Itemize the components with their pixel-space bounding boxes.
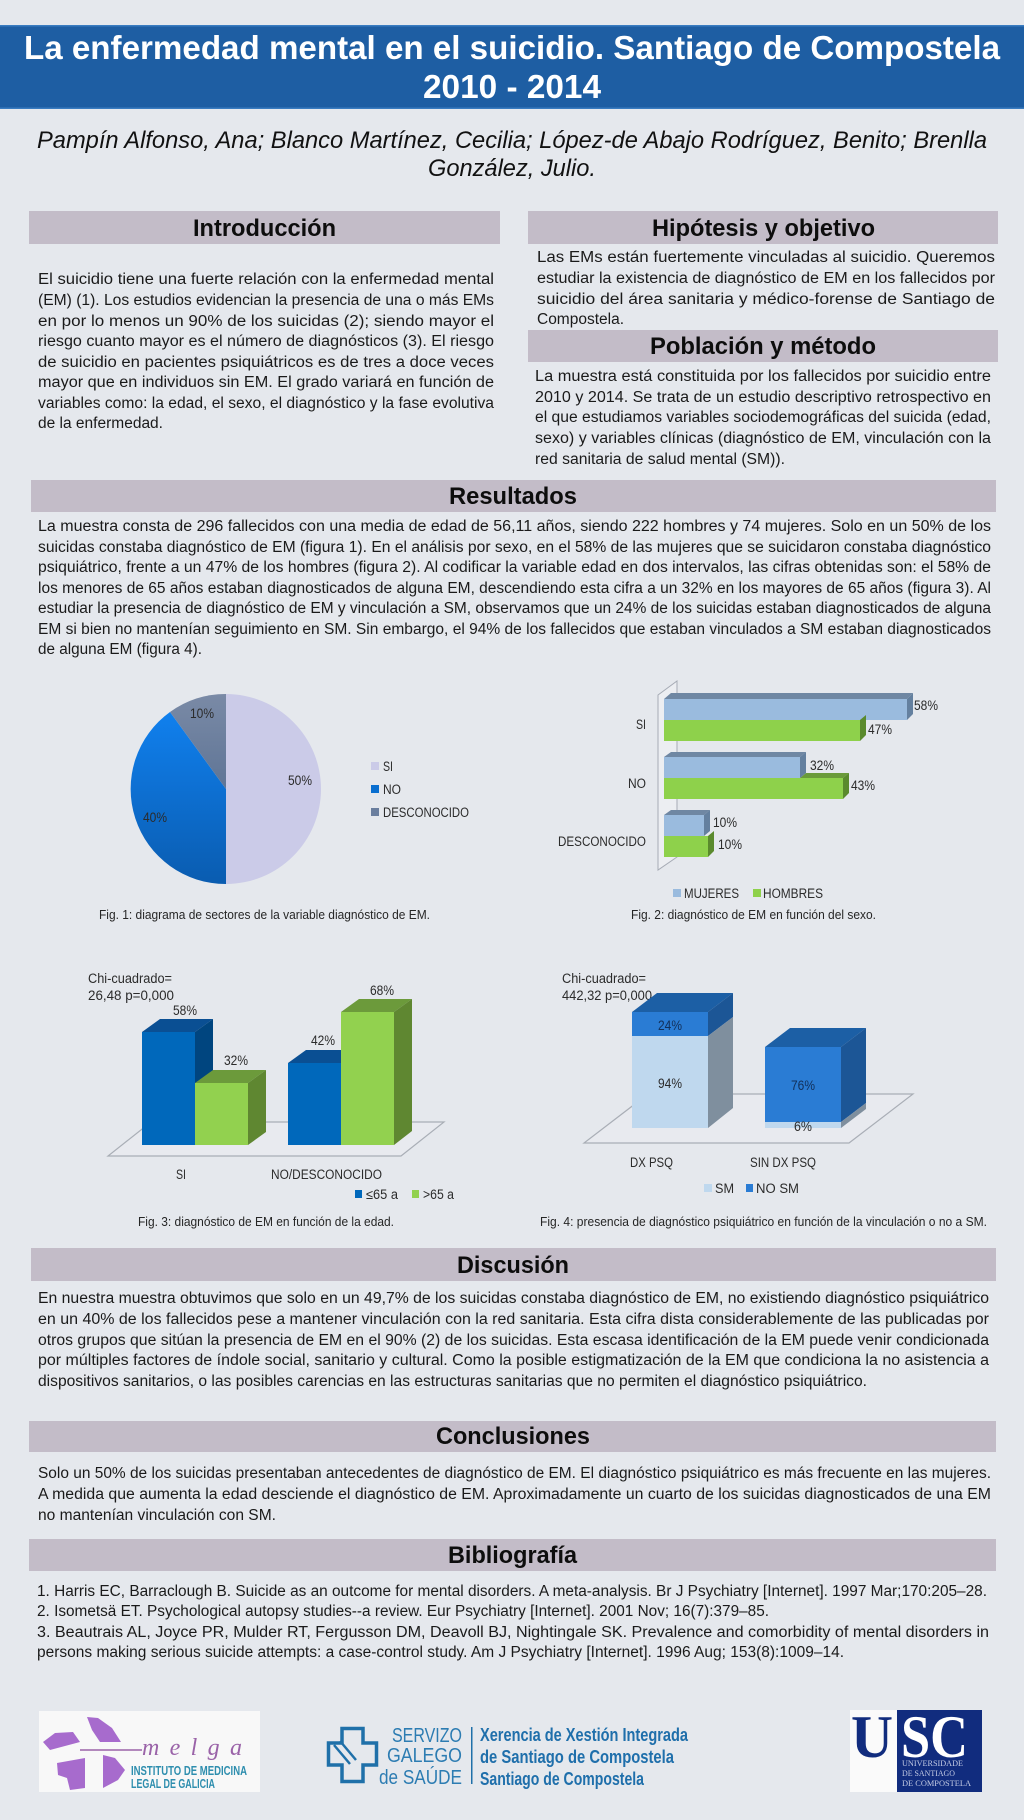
logo: Servizo Galego de Saúde — [328, 1725, 689, 1789]
authors — [37, 127, 987, 182]
value labels: 24% — [658, 1018, 682, 1033]
heading: discusión: Discusión — [457, 1252, 569, 1279]
text block: discusión: en un 40% de los fallecidos pese a mantener vinculación con la red sanitaria. Esta cifra dista considerablemente de las publicadas por — [38, 1311, 989, 1328]
category labels: DX PSQ — [630, 1155, 673, 1170]
value labels: 32% — [810, 758, 834, 773]
chi-square note — [562, 971, 652, 1003]
text block: introducción: (EM) (1). Los estudios evidencian la presencia de una o más EMs — [38, 292, 494, 309]
chart wall — [658, 681, 677, 870]
pie slice: DESCONOCIDO 10% — [170, 694, 226, 789]
logo: IMELGA: LEGAL DE GALICIA — [131, 1776, 215, 1791]
chart: figure 2 horizontal bars — [558, 681, 938, 901]
column: DX PSQ — [632, 993, 733, 1128]
text block: discusión: En nuestra muestra obtuvimos que solo en un 49,7% de los suicidas constaba diagnóstico de EM, no existiendo diagnóstico psiquiátrico — [38, 1290, 989, 1307]
text block: introducción: variables como: la edad, el sexo, el diagnóstico y la fase evolutiva — [38, 395, 494, 412]
panel: discusión — [31, 1248, 996, 1390]
text block: conclusiones — [38, 1465, 991, 1524]
bars: SI — [664, 693, 913, 741]
authors: González, Julio. — [428, 155, 596, 182]
category labels — [630, 1155, 816, 1170]
text block: población: el que estudiamos variables sociodemográficas del suicida (edad, — [535, 409, 991, 426]
text block: discusión: dispositivos sanitarios, o las posibles carencias en las estructuras sanitarias que no permiten el diagnóstico psiquiátrico. — [38, 1373, 867, 1390]
value labels: 58% — [173, 1003, 197, 1018]
text block: conclusiones: no mantenían vinculación con SM. — [38, 1507, 276, 1524]
heading: conclusiones — [29, 1421, 996, 1452]
category labels: NO/DESCONOCIDO — [271, 1167, 382, 1182]
text block: hipótesis: Las EMs están fuertemente vinculadas al suicidio. Queremos — [537, 249, 995, 266]
caption: figure 3: Fig. 3: diagnóstico de EM en función de la edad. — [138, 1215, 394, 1229]
columns: NO/DESCONOCIDO — [288, 999, 412, 1145]
floor — [584, 1094, 913, 1143]
title: La enfermedad mental en el suicidio. Santiago de Compostela — [24, 29, 1001, 66]
logo: USC — [850, 1704, 982, 1792]
chi-square note: Chi-cuadrado= — [88, 971, 172, 986]
panel: bibliografía — [29, 1539, 996, 1661]
text block: resultados: suicidas constaba diagnóstico de EM (figura 1). En el análisis por sexo, en el 58% de las mujeres que se suicidaron constaba diagnóstico — [38, 539, 991, 556]
logo: USC: U — [851, 1704, 893, 1770]
text block: references: 1. Harris EC, Barraclough B. Suicide as an outcome for mental disorders. A meta-analysis. Br J Psychiatry [Internet]. 1997 Mar;170:205–28. — [37, 1583, 987, 1600]
text block: introducción: en por lo menos un 90% de los suicidas (2); siendo mayor el — [38, 313, 494, 330]
text block: hipótesis — [537, 249, 995, 328]
legend: figure 1: NO — [383, 782, 401, 797]
value labels: 76% — [791, 1078, 815, 1093]
caption: figure 2: Fig. 2: diagnóstico de EM en función del sexo. — [631, 908, 876, 922]
floor — [108, 1122, 444, 1156]
text block: población — [535, 368, 991, 468]
text block: discusión: otros grupos que sitúan la presencia de EM en el 90% (2) de los suicidas. Esta escasa identificación de la EM puede venir condicionada — [38, 1332, 989, 1349]
chi-square note: 442,32 p=0,000 — [562, 988, 652, 1003]
chi-square note — [88, 971, 174, 1003]
text block: población: sexo) y variables clínicas (diagnóstico de EM, vinculación con la — [535, 430, 991, 447]
authors: Pampín Alfonso, Ana; Blanco Martínez, Cecilia; López-de Abajo Rodríguez, Benito; Brenlla — [37, 127, 987, 154]
pie slice: NO 40% — [131, 712, 226, 884]
logo: USC: UNIVERSIDADE — [902, 1758, 963, 1768]
category labels — [176, 1167, 382, 1182]
value labels — [173, 983, 394, 1068]
bars: DESCONOCIDO — [664, 810, 714, 857]
heading: introducción: Introducción — [193, 215, 336, 242]
panel: población y método — [528, 330, 998, 468]
value labels: 58% — [914, 698, 938, 713]
value labels: 6% — [794, 1119, 812, 1134]
category labels: SI — [176, 1167, 186, 1182]
category labels: SIN DX PSQ — [750, 1155, 816, 1170]
chart: figure 1 pie — [131, 694, 469, 884]
logo: Servizo Galego de Saúde: Xerencia de Xestión Integrada — [480, 1725, 689, 1745]
logo: Servizo Galego de Saúde: Santiago de Compostela — [480, 1769, 645, 1789]
text block: references: 2. Isometsä ET. Psychological autopsy studies--a review. Eur Psychiatry [Internet]. 2001 Nov; 16(7):379–85. — [37, 1603, 769, 1620]
value labels: 42% — [311, 1033, 335, 1048]
text block: introducción: mayor que en individuos sin EM. El grado variará en función de — [38, 374, 494, 391]
chi-square note: Chi-cuadrado= — [562, 971, 646, 986]
text block: hipótesis: suicidio del área sanitaria y médico-forense de Santiago de — [537, 291, 995, 308]
category labels: NO — [628, 776, 646, 791]
text block: resultados: La muestra consta de 296 fallecidos con una media de edad de 56,11 años, siendo 222 hombres y 74 mujeres. Solo en un 50% de los — [38, 518, 991, 535]
logo: USC: DE COMPOSTELA — [902, 1778, 972, 1788]
heading: bibliografía — [29, 1539, 996, 1571]
text block: conclusiones: Solo un 50% de los suicidas presentaban antecedentes de diagnóstico de EM. El diagnóstico psiquiátrico es más frecuente en las mujeres. — [38, 1465, 991, 1482]
title: 2010 - 2014 — [423, 68, 602, 105]
value labels: 94% — [658, 1076, 682, 1091]
text block: discusión — [38, 1290, 989, 1390]
value labels: 32% — [224, 1053, 248, 1068]
panel: resultados — [31, 480, 996, 658]
panel: introducción — [29, 211, 500, 432]
text block: resultados: EM si bien no mantenían seguimiento en SM. Sin embargo, el 94% de los fallecidos que estaban vinculados a SM estaban diagnosticados — [38, 621, 991, 638]
heading: población y método: Población y método — [650, 333, 876, 360]
text block: resultados: los menores de 65 años estaban diagnosticados de alguna EM, descendiendo esta cifra a un 32% en los mayores de 65 años (figura 3). Al — [38, 580, 991, 597]
caption: figure 4: Fig. 4: presencia de diagnóstico psiquiátrico en función de la vinculación o no a SM. — [540, 1215, 987, 1229]
text block: resultados: de alguna EM (figura 4). — [38, 641, 202, 658]
text block: hipótesis: estudiar la existencia de diagnóstico de EM en los fallecidos por — [537, 270, 995, 287]
text block: introducción — [38, 271, 494, 432]
logo: Servizo Galego de Saúde: SERVIZO — [392, 1725, 462, 1747]
text block: references — [37, 1583, 989, 1661]
value labels: 47% — [868, 722, 892, 737]
text block: población: La muestra está constituida por los fallecidos por suicidio entre — [535, 368, 991, 385]
column: SIN DX PSQ — [765, 1028, 866, 1128]
heading: discusión — [31, 1248, 996, 1281]
legend: figure 3 — [355, 1187, 454, 1202]
text block: introducción: riesgo cuanto mayor es el número de diagnósticos (3). El riesgo — [38, 333, 494, 350]
value labels: 10% — [713, 815, 737, 830]
panel: conclusiones — [29, 1421, 996, 1524]
icon: cross — [328, 1728, 376, 1782]
legend: figure 2: HOMBRES — [763, 886, 823, 901]
heading: hipótesis y objetivo: Hipótesis y objetivo — [652, 215, 875, 242]
text block: references: 3. Beautrais AL, Joyce PR, Mulder RT, Fergusson DM, Deavoll BJ, Nightingale SK. Prevalence and comorbidity of mental disorders in — [37, 1624, 989, 1641]
legend: figure 2: MUJERES — [684, 886, 739, 901]
text block: población: red sanitaria de salud mental (SM)). — [535, 451, 785, 468]
caption: figure 1: Fig. 1: diagrama de sectores de la variable diagnóstico de EM. — [99, 908, 430, 922]
bars: NO — [664, 752, 849, 799]
text block: introducción: de la enfermedad. — [38, 415, 163, 432]
heading: bibliografía: Bibliografía — [448, 1542, 578, 1569]
legend: figure 1 — [371, 759, 469, 820]
heading: resultados: Resultados — [449, 483, 577, 510]
text block: población: 2010 y 2014. Se trata de un estudio descriptivo retrospectivo en — [535, 389, 991, 406]
chart: figure 1 pie: 50% — [288, 773, 312, 788]
logo: IMELGA — [39, 1711, 260, 1792]
legend: figure 1: SI — [383, 759, 393, 774]
legend: figure 3: ≤65 a — [366, 1187, 398, 1202]
legend: figure 4: NO SM — [756, 1181, 799, 1196]
legend: figure 3: >65 a — [423, 1187, 454, 1202]
text block: resultados: psiquiátrico, frente a un 47% de los hombres (figura 2). Al codificar la variable edad en dos intervalos, las cifras obtenidas son: el 58% de — [38, 559, 991, 576]
chart: figure 1 pie: 10% — [190, 706, 214, 721]
value labels — [713, 698, 938, 852]
text block: references: persons making serious suicide attempts: a case-control study. Am J Psychiatry [Internet]. 1996 Aug; 153(8):1009–14. — [37, 1644, 844, 1661]
logo: Servizo Galego de Saúde: GALEGO — [387, 1745, 462, 1767]
legend: figure 4 — [704, 1181, 799, 1196]
columns: SI — [142, 1019, 266, 1145]
pie slice: SI 50% — [226, 694, 321, 884]
category labels: DESCONOCIDO — [558, 834, 646, 849]
value labels: 10% — [718, 837, 742, 852]
text block: resultados: estudiar la presencia de diagnóstico de EM y vinculación a SM, observamos que un 24% de los suicidas estaban diagnosticados de alguna — [38, 600, 991, 617]
logo: IMELGA: INSTITUTO DE MEDICINA — [131, 1763, 247, 1778]
text block: conclusiones: A medida que aumenta la edad desciende el diagnóstico de EM. Aproximadamente un cuarto de los suicidas diagnosticados de una EM — [38, 1486, 991, 1503]
heading: conclusiones: Conclusiones — [436, 1423, 590, 1450]
value labels: 68% — [370, 983, 394, 998]
title — [0, 25, 1024, 109]
chart: figure 1 pie: 40% — [143, 810, 167, 825]
chart: figure 3 3D columns — [88, 971, 454, 1202]
logo: USC: DE SANTIAGO — [902, 1768, 955, 1778]
text block: discusión: por múltiples factores de índole social, sanitario y cultural. Como la posible estigmatización de la EM que condiciona la no asistencia a — [38, 1352, 989, 1369]
logo: USC: SC — [901, 1704, 968, 1770]
panel: hipótesis y objetivo — [528, 211, 998, 328]
text block: introducción: El suicidio tiene una fuerte relación con la enfermedad mental — [38, 271, 494, 288]
heading: hipótesis y objetivo — [528, 211, 998, 244]
logo: Servizo Galego de Saúde: de Santiago de Compostela — [480, 1747, 675, 1767]
category labels: SI — [636, 717, 646, 732]
text block: hipótesis: Compostela. — [537, 311, 624, 328]
heading: introducción — [29, 211, 500, 244]
chi-square note: 26,48 p=0,000 — [88, 988, 174, 1003]
text block: introducción: de suicidio en pacientes psiquiátricos es de tres a doce veces — [38, 354, 494, 371]
logo: Servizo Galego de Saúde: de SAÚDE — [379, 1766, 462, 1789]
value labels — [658, 1018, 815, 1134]
logo: IMELGA: melga — [142, 1735, 242, 1761]
heading: resultados — [31, 480, 996, 512]
text block: resultados — [38, 518, 991, 658]
legend: figure 2 — [673, 886, 823, 901]
legend: figure 4: SM — [715, 1181, 734, 1196]
heading: población y método — [528, 330, 998, 362]
chart: figure 4 stacked 3D columns — [562, 971, 913, 1196]
value labels: 43% — [851, 778, 875, 793]
legend: figure 1: DESCONOCIDO — [383, 805, 469, 820]
category labels — [558, 717, 646, 849]
